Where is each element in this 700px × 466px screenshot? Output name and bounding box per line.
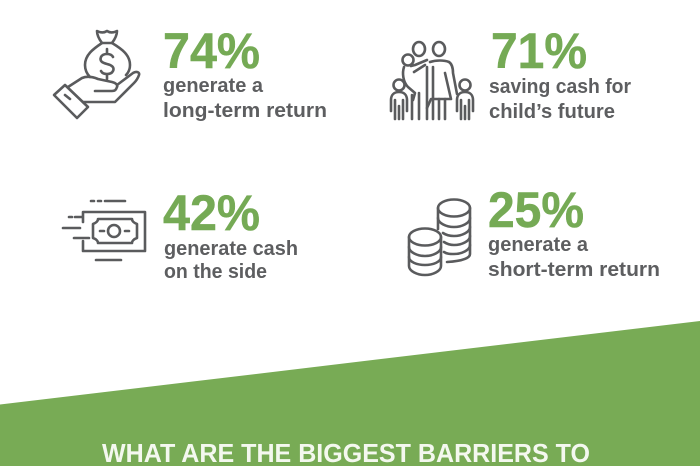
stat: 74% long-term return — [54, 23, 327, 122]
icon: flying banknote — [63, 201, 145, 260]
stat: 25% short-term return — [409, 182, 660, 281]
figure: 42%: 42% — [163, 185, 260, 241]
text: saving cash for child's future: child’s future — [489, 101, 615, 123]
figure: 74%: 74% — [163, 23, 260, 79]
text: generate a long-term return: generate a — [163, 75, 264, 97]
text: generate a short-term return — [488, 234, 660, 281]
text: generate cash on the side: generate cash — [164, 238, 298, 260]
text: saving cash for child's future — [489, 76, 631, 123]
figure: 71%: 71% — [491, 23, 587, 79]
stat: 71% saving for child's future — [391, 23, 631, 123]
text: generate a long-term return: long-term return — [163, 100, 327, 122]
panel: green slanted band — [0, 321, 700, 466]
text: generate a short-term return: generate a — [488, 234, 589, 256]
figure: 25%: 25% — [488, 182, 584, 238]
text: generate cash on the side — [164, 238, 298, 283]
stat: 42% cash on the side — [63, 185, 298, 283]
text: generate cash on the side: on the side — [164, 261, 267, 283]
text: generate a long-term return — [163, 75, 327, 122]
text: saving cash for child's future: saving cash for — [489, 76, 631, 98]
icon: hand holding money bag — [54, 31, 139, 118]
text: generate a short-term return: short-term return — [488, 259, 660, 281]
icon: family — [391, 42, 473, 119]
icon: coin stacks — [409, 200, 470, 275]
